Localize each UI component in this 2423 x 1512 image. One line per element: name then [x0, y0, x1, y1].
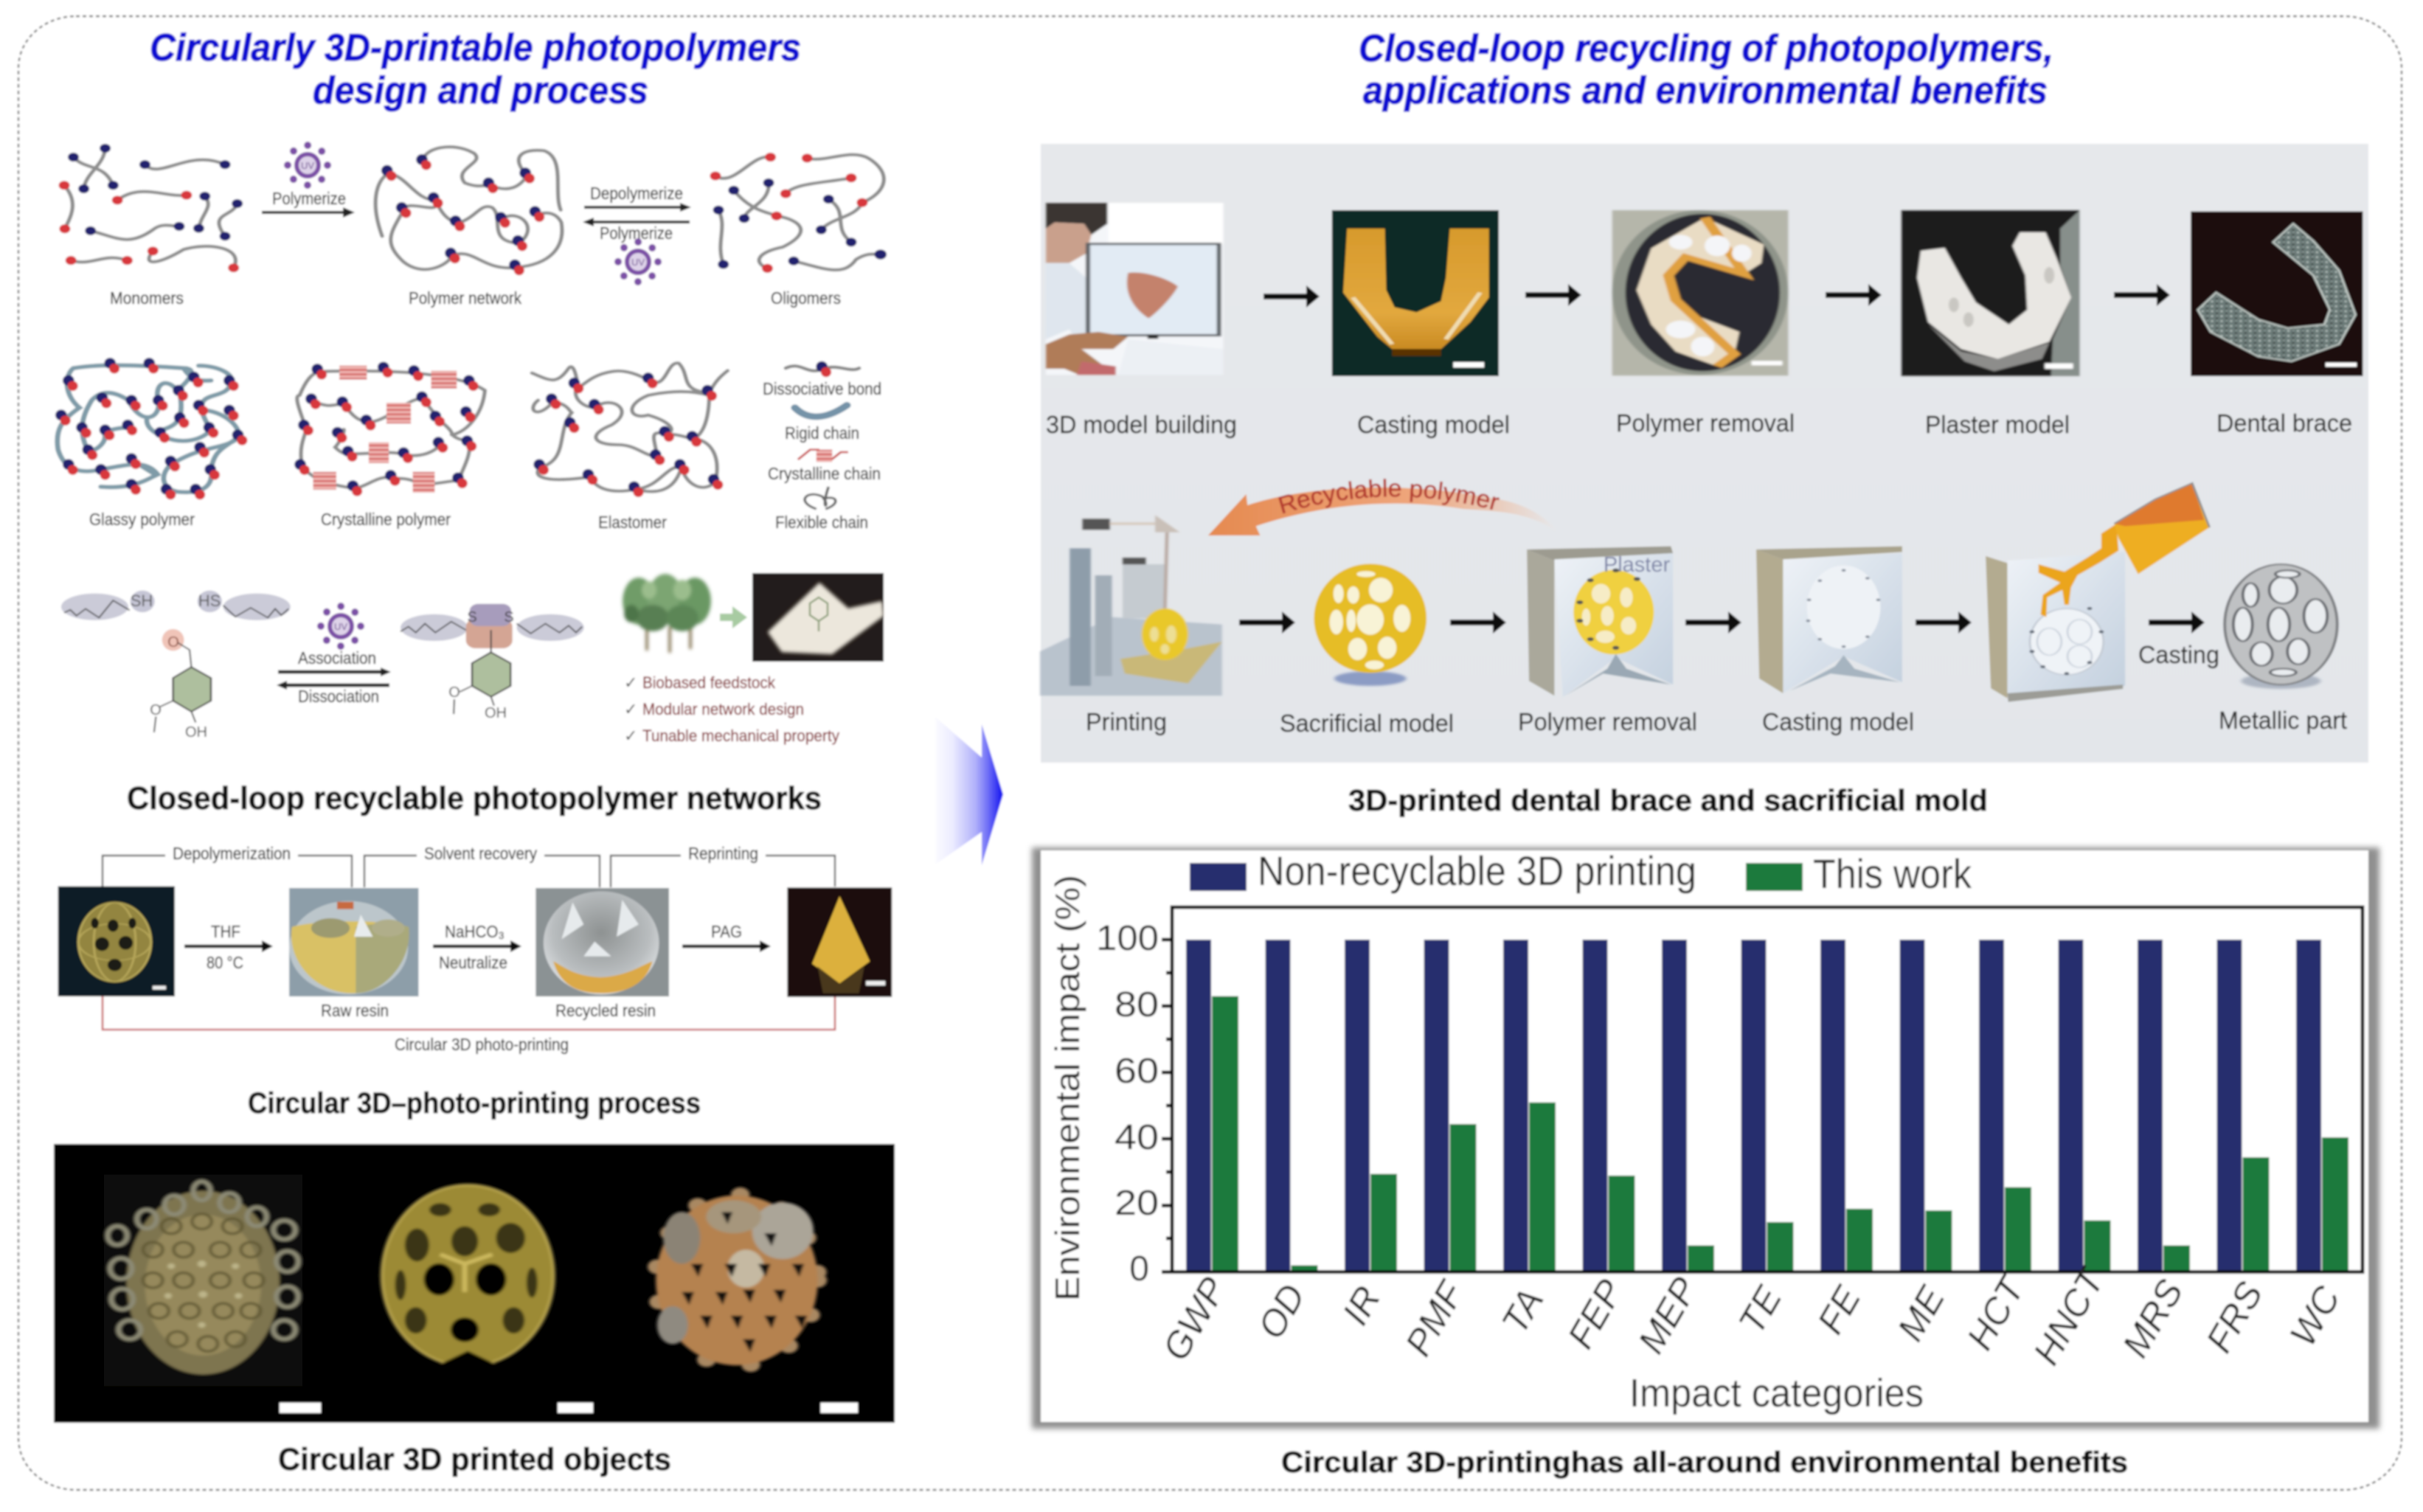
arrow: recyclable polymer: Recyclable polymer: [1278, 478, 1500, 515]
chart: y tick labels: 60: [1115, 1052, 1159, 1091]
chart: category labels: [1154, 1260, 2349, 1372]
title: right column: applications and environmental benefits: [1363, 69, 2048, 112]
brackets: [103, 856, 835, 887]
legend: chain types: Crystalline chain: [768, 464, 881, 483]
arrow: recyclable polymer: [1208, 478, 1545, 537]
chart: category labels: TA: [1494, 1282, 1552, 1341]
labels: top row: Polymer removal: [1616, 409, 1795, 437]
photo: 3D model building: [1046, 203, 1224, 375]
list: benefits: Biobased feedstock: [642, 673, 776, 692]
icon: UV reverse: [618, 242, 658, 282]
scale bars: [280, 1403, 858, 1413]
chart: category labels: FRS: [2198, 1275, 2271, 1359]
label: association: Association: [298, 648, 376, 667]
diagram: glassy polymer: [55, 358, 247, 499]
title: right column: [1359, 27, 2053, 112]
title: right column: Closed-loop recycling of photopolymers,: [1359, 27, 2053, 70]
legend: chain types: Rigid chain: [785, 423, 859, 443]
illustration: casting model mold: [1756, 547, 1902, 693]
arrow: step 3: [1826, 284, 1882, 306]
labels: process: [173, 844, 758, 1054]
labels: bottom row: Printing: [1086, 708, 1167, 735]
labels: process: Raw resin: [321, 1001, 389, 1020]
title: left column: design and process: [313, 69, 648, 112]
chart: y tick labels: 80: [1115, 985, 1159, 1024]
loop line: [103, 996, 835, 1030]
heading: process: Circular 3D–photo-printing process: [248, 1087, 701, 1120]
label: elastomer: Elastomer: [598, 513, 667, 532]
panel: network chemistry: [61, 573, 884, 745]
illustration: sacrificial model sphere: [1314, 563, 1427, 686]
chart: category labels: OD: [1250, 1277, 1314, 1345]
diagram: thioacetal product: O: [448, 684, 460, 701]
label: polymer network: Polymer network: [409, 288, 521, 308]
photo: plaster model: [1902, 210, 2080, 376]
label: polymerize reverse: Polymerize: [600, 223, 673, 243]
list: benefits: Modular network design: [642, 700, 804, 718]
axis title: x: Impact categories: [1629, 1371, 1924, 1415]
arrow: step 4: [2114, 284, 2170, 306]
labels: process: THF: [211, 922, 240, 941]
labels: bottom row: Casting model: [1762, 708, 1914, 735]
panel: circular process: [58, 844, 892, 1054]
chart: y tick labels: 100: [1096, 919, 1159, 958]
labels: process: Reprinting: [688, 844, 758, 863]
labels: bottom row: Casting: [2138, 641, 2219, 668]
diagram: thiol monomers and vanillin: HS: [198, 592, 221, 610]
photo object: lattice ball 3: [656, 1195, 817, 1366]
arrow: model to mold: [1450, 611, 1506, 634]
diagram: monomers: [59, 144, 243, 272]
labels: top row: [1046, 409, 2352, 438]
labels: process: NaHCO₃: [445, 922, 505, 941]
labels: bottom row: Metallic part: [2219, 707, 2347, 734]
heading: environmental benefits: Circular 3D-printinghas all-around environmental benefits: [1281, 1446, 2128, 1479]
chart: bars this work: [1212, 996, 2349, 1272]
diagram: thiol monomers and vanillin: SH: [131, 592, 153, 610]
labels: bottom row: Sacrificial model: [1280, 710, 1454, 737]
panel: printed objects photo: [54, 1144, 895, 1423]
label: glassy polymer: Glassy polymer: [89, 510, 195, 529]
arrow: biomass to powder: [720, 606, 747, 628]
labels: process: Depolymerization: [173, 844, 291, 863]
arrow head: polymerize: [343, 207, 355, 218]
labels: top row: Dental brace: [2216, 409, 2352, 437]
chart: category labels: MEP: [1630, 1270, 1706, 1360]
legend: chart: [1190, 847, 1972, 897]
arrow heads: reversible: [583, 203, 691, 226]
chart: category labels: HCT: [1959, 1269, 2034, 1356]
icon: UV reverse: UV: [631, 257, 645, 268]
labels: process: Solvent recovery: [424, 844, 537, 863]
labels: bottom row: [1086, 641, 2347, 737]
arrow: left to right chevron: [935, 717, 1003, 865]
label: depolymerize: Depolymerize: [590, 184, 683, 203]
labels: bottom row: Polymer removal: [1518, 708, 1697, 735]
chart: y tick labels: 20: [1115, 1184, 1159, 1223]
legend: chain types: Dissociative bond: [763, 379, 881, 398]
arrows: association and dissociation: [278, 672, 389, 685]
arrow: step 2: [1525, 284, 1581, 306]
list: benefits: ✓: [624, 700, 637, 718]
arrows: process: [184, 940, 771, 952]
label: oligomers: Oligomers: [771, 288, 841, 308]
label: crystalline polymer: Crystalline polymer: [321, 510, 451, 529]
chart: category labels: WC: [2281, 1279, 2349, 1353]
labels: process: 80 °C: [207, 953, 243, 972]
legend: chart: This work: [1813, 850, 1972, 897]
labels: process: Recycled resin: [555, 1001, 656, 1020]
illustration: printer: [1040, 515, 1222, 696]
icon: trees biomass: [623, 574, 711, 653]
chart: category labels: MRS: [2114, 1273, 2191, 1364]
chart: category labels: HNCT: [2025, 1260, 2113, 1372]
arrow: print to model: [1239, 611, 1295, 634]
illustration: plaster mold with polymer: Plaster: [1604, 553, 1670, 577]
diagram: oligomers: [710, 153, 887, 273]
list: benefits: ✓: [624, 673, 637, 692]
arrow: casting model to pour: [1916, 611, 1972, 634]
chart: category labels: TE: [1730, 1279, 1790, 1341]
photo: polymer removal: [1612, 210, 1788, 375]
photo: casting model: [1332, 210, 1499, 376]
legend: chart: Non-recyclable 3D printing: [1258, 847, 1696, 894]
labels: top row: Plaster model: [1925, 411, 2070, 438]
arrow: polymerize: [262, 211, 347, 214]
diagram: thioacetal product: S: [504, 609, 514, 625]
photos: process steps: [58, 887, 892, 997]
list: benefits: Tunable mechanical property: [642, 726, 839, 745]
heading: dental brace: 3D-printed dental brace and sacrificial mold: [1348, 783, 1988, 817]
panel: environmental impact chart: [1032, 847, 2379, 1429]
photo object: lattice ball 1: [104, 1174, 302, 1386]
chart: category labels: IR: [1334, 1279, 1389, 1332]
labels: top row: 3D model building: [1046, 411, 1237, 438]
chart: y tick labels: 40: [1115, 1118, 1159, 1157]
arrows: reversible: [584, 207, 690, 222]
labels: process: PAG: [711, 922, 742, 941]
chart: category labels: FE: [1809, 1279, 1869, 1341]
icon: UV polymerize: UV: [301, 160, 314, 171]
arrow: pour to casting: [2149, 611, 2205, 634]
illustration: pouring mold: [1986, 483, 2210, 702]
axis title: y: Environmental impact (%): [1048, 875, 1086, 1301]
diagram: thiol monomers and vanillin: OH: [185, 724, 207, 741]
chart: bars non-recyclable: [1186, 940, 2321, 1272]
label: polymerize: Polymerize: [272, 189, 346, 208]
title: left column: Circularly 3D-printable photopolymers: [150, 27, 801, 69]
label: monomers: Monomers: [110, 288, 184, 308]
diagram: thiol monomers and vanillin: O: [167, 634, 179, 651]
illustration: plaster mold with polymer: [1527, 547, 1673, 697]
photo: dental brace: [2191, 212, 2363, 376]
labels: process: Neutralize: [439, 953, 507, 972]
panel: dental brace and sacrificial mold: [1039, 143, 2369, 763]
diagram: thioacetal product: OH: [485, 705, 507, 721]
arrow: mold to casting model: [1685, 611, 1741, 634]
chart: category labels: FEP: [1559, 1272, 1632, 1356]
labels: process: Circular 3D photo-printing: [395, 1035, 569, 1054]
arrow heads: association: [277, 667, 391, 690]
chart: y tick labels: [1096, 919, 1159, 1289]
diagram: thiol monomers and vanillin: [61, 591, 291, 741]
labels: top row: Casting model: [1357, 411, 1510, 438]
diagram: thioacetal product: S: [467, 609, 477, 625]
diagram: thiol monomers and vanillin: O: [150, 702, 162, 718]
chart: category labels: GWP: [1154, 1270, 1235, 1367]
legend: chain types: Flexible chain: [775, 513, 868, 532]
panel: polymer types: [55, 358, 881, 532]
heading: printed objects: Circular 3D printed objects: [278, 1442, 671, 1477]
icon: UV association: [321, 606, 361, 646]
list: benefits: [624, 673, 839, 745]
heading: closed-loop networks: Closed-loop recyclable photopolymer networks: [127, 780, 822, 816]
panel: polymerization scheme: [59, 144, 887, 308]
chart: category labels: ME: [1890, 1279, 1953, 1348]
label: dissociation: Dissociation: [298, 687, 379, 706]
arrow: step 1: [1264, 285, 1320, 308]
chart: plot frame and ticks: [1162, 907, 2363, 1272]
icon: UV association: UV: [334, 621, 347, 632]
illustration: metallic part: [2225, 564, 2337, 689]
diagram: thioacetal product: [401, 604, 584, 721]
diagram: polymer network: [375, 147, 562, 275]
photo object: lattice ball 2: [382, 1185, 553, 1370]
chart: y tick labels: 0: [1129, 1249, 1149, 1289]
list: benefits: ✓: [624, 726, 637, 745]
legend: chain types: [763, 361, 881, 532]
diagram: elastomer: [532, 363, 728, 497]
photo: lignin powder: [752, 573, 884, 662]
diagram: crystalline polymer: [294, 361, 485, 496]
title: left column: [150, 27, 801, 112]
chart: category labels: PMF: [1397, 1273, 1473, 1363]
icon: UV polymerize: [288, 145, 327, 185]
